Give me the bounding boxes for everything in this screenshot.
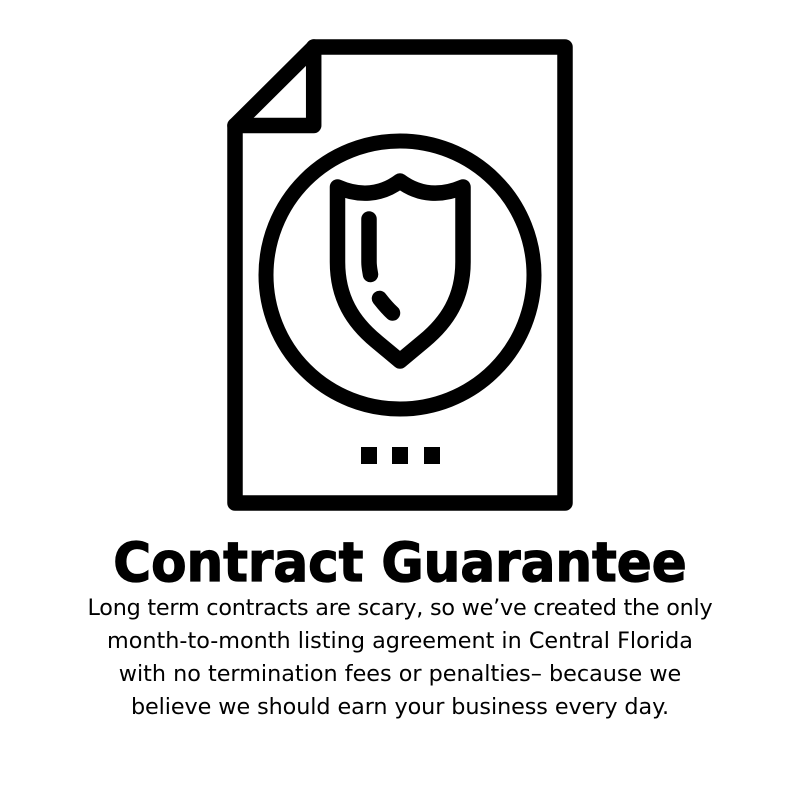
document outline [235, 47, 565, 503]
body text: believe we should earn your business every day. [131, 694, 669, 720]
body text [88, 595, 712, 720]
body text: Long term contracts are scary, so we’ve created the only [88, 595, 712, 621]
shield [338, 181, 463, 361]
shield highlight [369, 219, 392, 313]
body text: month-to-month listing agreement in Central Florida [107, 628, 693, 654]
folded corner [235, 47, 314, 126]
icon: contract document with shield [227, 39, 573, 511]
three dots [361, 447, 440, 464]
circle [266, 141, 534, 409]
body text: with no termination fees or penalties– because we [119, 661, 681, 687]
title: Contract Guarantee [113, 531, 687, 594]
